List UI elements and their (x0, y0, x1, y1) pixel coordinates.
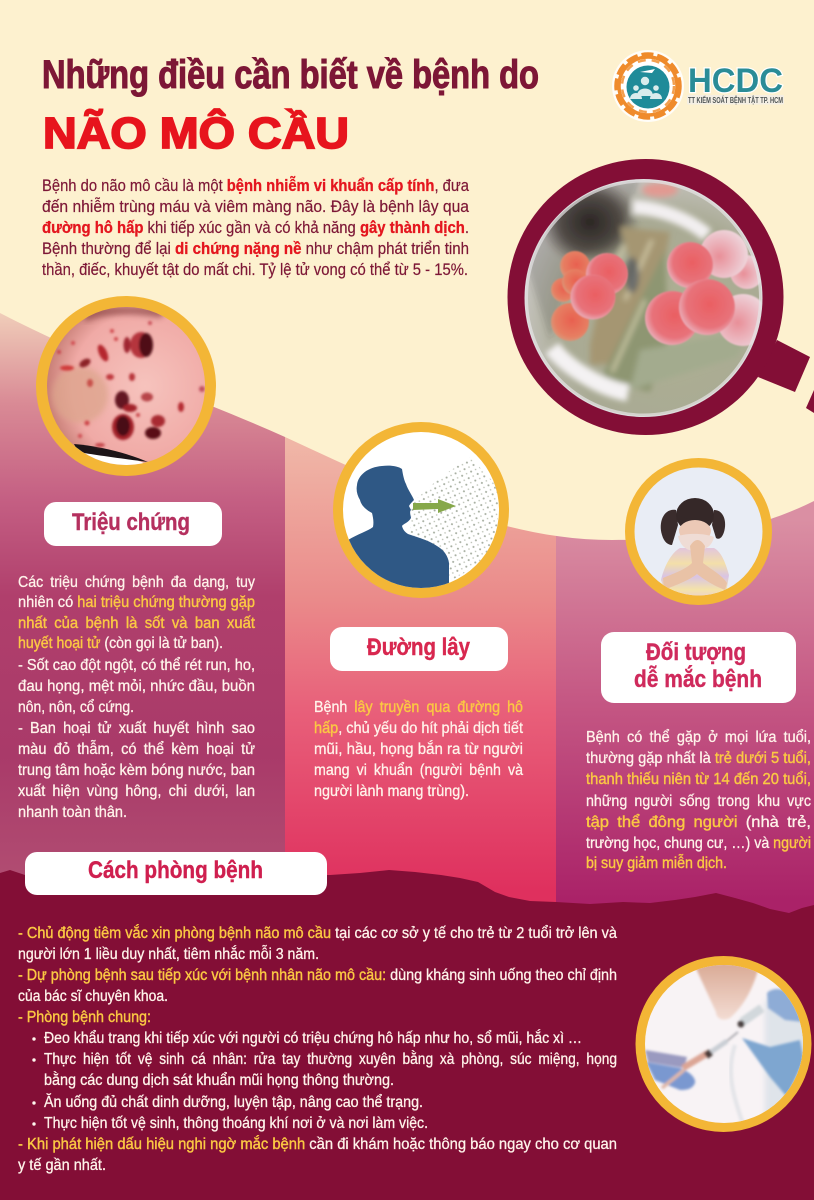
text block: transmission: mũi, hầu, họng bắn ra từ người (314, 739, 523, 758)
icon: girl with mask (625, 458, 772, 605)
text block: symptoms (18, 574, 256, 821)
text block: transmission: mang vi khuẩn (người bệnh và (314, 761, 523, 779)
logo: HCDC (612, 50, 784, 122)
heading: symptoms: Triệu chứng (72, 509, 190, 536)
icon: magnifier with bacteria (508, 159, 814, 435)
text block: at-risk groups: bị suy giảm miễn dịch. (586, 853, 727, 872)
text block: at-risk groups: trường học, chung cư, …) và người (586, 835, 811, 852)
text block: transmission (314, 699, 524, 800)
text block: prevention: của bác sĩ chuyên khoa. (18, 988, 168, 1005)
text block: prevention: - Khi phát hiện dấu hiệu nghi ngờ mắc bệnh cần đi khám hoặc thông báo ngay cho cơ quan (18, 1134, 617, 1153)
text block: symptoms: Các triệu chứng bệnh đa dạng, tuy (18, 574, 255, 591)
heading: prevention (25, 852, 327, 895)
heading: transmission: Đường lây (367, 634, 470, 661)
panel: prevention background (0, 870, 814, 1200)
logo: HCDC: HCDC (688, 62, 783, 100)
text block: introduction: thần, điếc, khuyết tật do mất chi. Tỷ lệ tử vong có thể từ 5 - 15%. (42, 261, 468, 279)
text block: symptoms: nhất của bệnh là sốt và ban xuất (18, 615, 256, 632)
text block: prevention: Thực hiện tốt vệ sinh, thông thoáng khí nơi ở và nơi làm việc. (44, 1115, 428, 1132)
text block: symptoms: đau họng, mệt mỏi, nhức đầu, buồn (18, 678, 255, 695)
text block: introduction: Bệnh thường để lại di chứng nặng nề như chậm phát triển tinh (42, 240, 469, 258)
text block: at-risk groups (586, 728, 811, 872)
icon: person breathing droplets (333, 422, 509, 598)
text block: symptoms: trung tâm hoặc kèm bóng nước, ban (18, 762, 255, 779)
icon: skin rash photo (36, 296, 216, 476)
heading: prevention: Cách phòng bệnh (88, 857, 263, 884)
text block: symptoms: - Ban hoại tử xuất huyết hình sao (18, 720, 255, 737)
text block: symptoms: huyết hoại tử (còn gọi là tử ban). (18, 635, 223, 652)
title: NÃO MÔ CẦU (43, 107, 349, 158)
icon: vaccination photo (636, 956, 812, 1132)
text block: prevention: người lớn 1 liều duy nhất, tiêm nhắc mỗi 3 năm. (18, 944, 319, 963)
heading: at-risk groups: dễ mắc bệnh (634, 665, 762, 693)
title (42, 53, 539, 158)
text block: transmission: Bệnh lây truyền qua đường hô (314, 699, 523, 716)
text block: symptoms: xuất hiện vùng hông, chi dưới, lan (18, 783, 255, 800)
text block: prevention: Đeo khẩu trang khi tiếp xúc với người có triệu chứng hô hấp như ho, sổ mũi, hắc xì … (44, 1028, 582, 1047)
heading: at-risk groups: Đối tượng (646, 639, 746, 666)
text block: symptoms: màu đỏ thẫm, có thể kèm hoại tử (18, 739, 255, 758)
text block: prevention (18, 923, 617, 1174)
text block: symptoms: nhiên có hai triệu chứng thường gặp (18, 594, 255, 611)
text block: symptoms: nôn, nôn, cổ cứng. (18, 698, 134, 716)
text block: introduction: đến nhiễm trùng máu và viêm màng não. Đây là bệnh lây qua (42, 197, 470, 216)
text block: at-risk groups: thường gặp nhất là trẻ dưới 5 tuổi, (586, 749, 811, 767)
text block: prevention: Ăn uống đủ chất dinh dưỡng, luyện tập, nâng cao thể trạng. (44, 1092, 423, 1111)
text block: transmission: hấp, chủ yếu do hít phải dịch tiết (314, 720, 524, 737)
text block: symptoms: - Sốt cao đột ngột, có thể rét run, ho, (18, 656, 255, 674)
title: Những điều cần biết về bệnh do (42, 53, 539, 97)
text block: at-risk groups: tập thể đông người (nhà trẻ, (586, 813, 811, 831)
text block: prevention: Thực hiện tốt vệ sinh cá nhân: rửa tay thường xuyên bằng xà phòng, súc miệng, họng (44, 1049, 617, 1068)
text block: introduction (42, 176, 470, 279)
text block: symptoms: nhanh toàn thân. (18, 804, 127, 821)
text block: prevention: - Dự phòng bệnh sau tiếp xúc với bệnh nhân não mô cầu: dùng kháng sinh uống theo chỉ định (18, 967, 617, 984)
heading: symptoms (44, 502, 222, 546)
text block: prevention: - Chủ động tiêm vắc xin phòng bệnh não mô cầu tại các cơ sở y tế cho trẻ từ 2 tuổi trở lên và (18, 923, 617, 942)
text block: introduction: Bệnh do não mô cầu là một bệnh nhiễm vi khuẩn cấp tính, đưa (42, 176, 470, 195)
text block: prevention: bằng các dung dịch sát khuẩn mũi họng thông thường. (44, 1070, 394, 1089)
heading: at-risk groups (601, 632, 796, 703)
text block: prevention: y tế gần nhất. (18, 1157, 106, 1174)
text block: introduction: đường hô hấp khi tiếp xúc gần và có khả năng gây thành dịch. (42, 219, 469, 237)
text block: transmission: người lành mang trùng). (314, 783, 469, 800)
text block: prevention: - Phòng bệnh chung: (18, 1009, 151, 1026)
cream wave (0, 0, 814, 540)
panel: column backgrounds (0, 300, 814, 920)
heading: transmission (330, 627, 508, 671)
